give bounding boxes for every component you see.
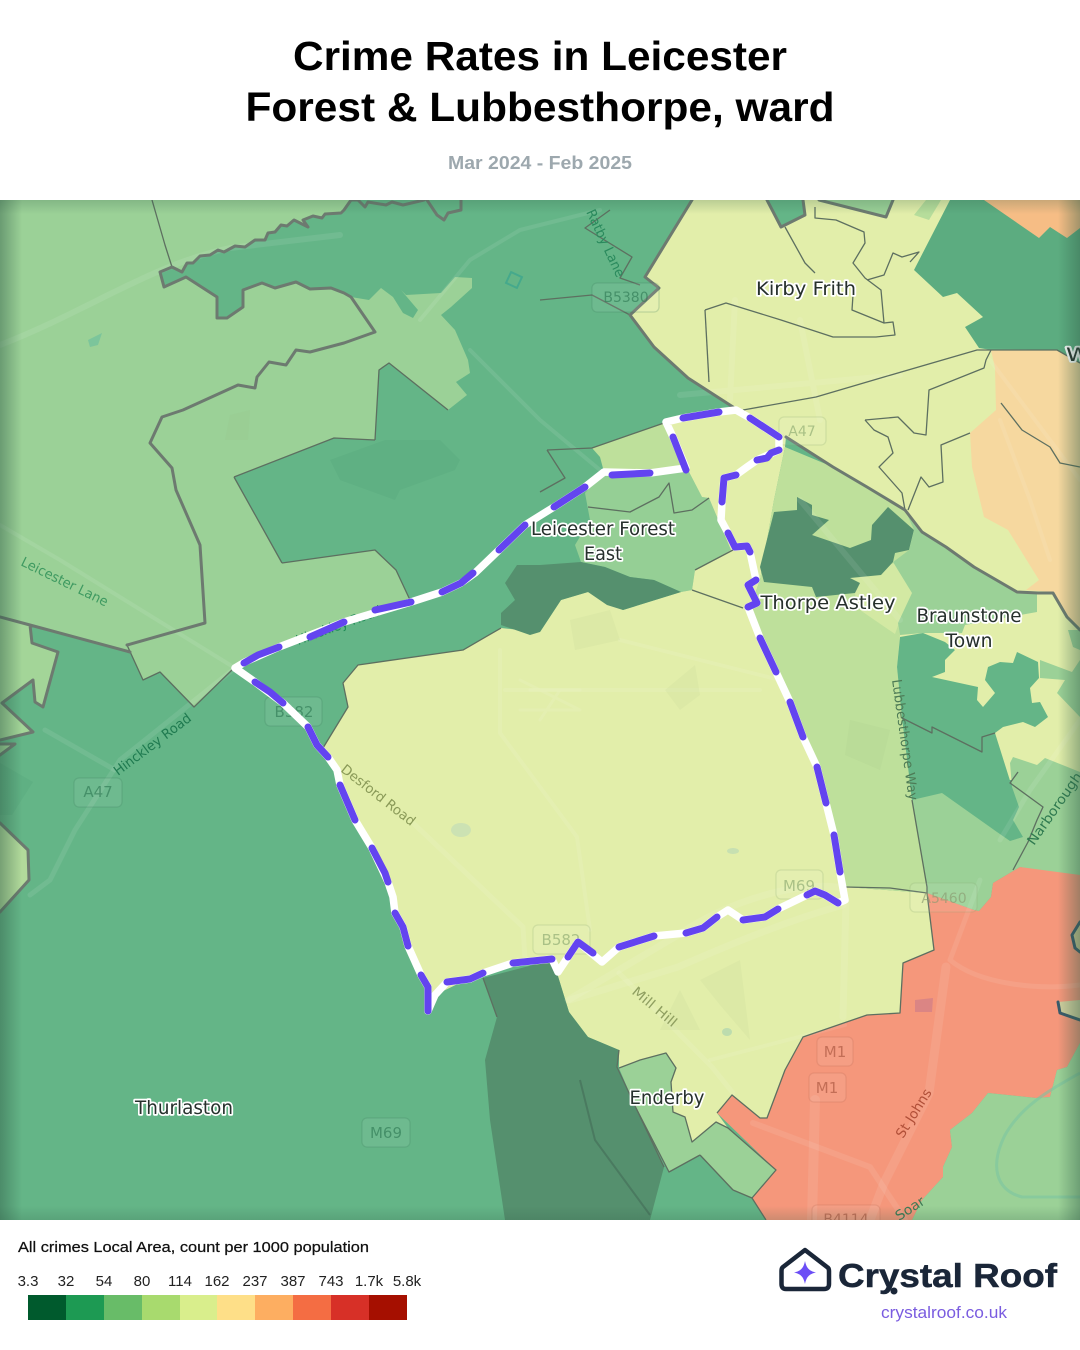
legend value labels: 80 (134, 1273, 150, 1290)
area: south-east light green (912, 1043, 1080, 1220)
area: slightly darker green blocks (914, 208, 1064, 352)
place labels: Braunstone (916, 605, 1022, 627)
place labels: Enderby (630, 1087, 704, 1109)
area: south Braunstone light green (912, 757, 1080, 911)
area: orange high-crime zone (970, 350, 1080, 630)
place labels: Leicester Forest (531, 518, 675, 540)
legend colour scale (28, 1295, 407, 1320)
road shields: M1 (824, 1043, 846, 1061)
thin area borders (127, 200, 1080, 1220)
logo wordmark: Crystal Roof (838, 1257, 1058, 1294)
area: north small patches (767, 200, 941, 227)
road labels: Hinckley Road (111, 710, 195, 779)
road shields: B4114 (823, 1212, 869, 1228)
legend (18, 1239, 422, 1320)
water features (88, 272, 933, 1036)
place labels: Thurlaston (134, 1097, 233, 1119)
road shields: M1 (816, 1079, 838, 1097)
place labels: Town (945, 630, 992, 652)
area: Leicester Forest East north (592, 424, 680, 470)
subtitle: date range: Mar 2024 - Feb 2025 (448, 153, 632, 173)
website url: crystalroof.co.uk (881, 1304, 1008, 1322)
place labels (134, 278, 1080, 1119)
road shields: B582 (542, 931, 580, 949)
road labels: Leicester Lane (18, 554, 111, 610)
legend value labels: 32 (58, 1273, 74, 1290)
area: Braunstone green block (897, 633, 1048, 800)
area: far west light green patches (0, 617, 58, 912)
area: Braunstone Town light green (893, 510, 1037, 635)
logo: Crystal Roof (782, 1250, 1058, 1322)
area: Thorpe Astley pale patch (850, 563, 912, 634)
place labels: East (584, 543, 622, 565)
legend value labels: 162 (204, 1273, 230, 1290)
map base: mid green area (0, 200, 1080, 1220)
legend value labels (18, 1273, 422, 1290)
area: west light green (0, 200, 472, 707)
choropleth map (0, 200, 1080, 1234)
road labels: St Johns (893, 1086, 936, 1141)
road network (0, 210, 1080, 1220)
legend value labels: 387 (280, 1273, 306, 1290)
title: Crime Rates in Leicester (293, 33, 787, 79)
area: north-east pale yellow (630, 200, 1080, 780)
road shields: A5460 (921, 891, 967, 907)
ward boundary purple dashes (244, 412, 840, 1011)
thick district borders (0, 200, 1080, 1020)
road labels: Lubbesthorpe Way (888, 678, 921, 801)
legend value labels: 54 (96, 1273, 112, 1290)
road labels: Mill Hill (628, 984, 680, 1031)
area: Enderby light green (619, 1053, 776, 1198)
legend title: All crimes Local Area, count per 1000 population (18, 1239, 369, 1256)
road labels: Ratby Lane (582, 207, 628, 280)
ward boundary: white line with purple dashes (235, 410, 845, 1011)
road shields: B5380 (603, 290, 649, 306)
road shields: A47 (788, 424, 816, 440)
road labels: Hinckley Road (294, 603, 384, 649)
place labels: Thorpe Astley (759, 592, 896, 614)
legend value labels: 743 (318, 1273, 344, 1290)
road labels: Desford Road (338, 762, 418, 830)
road shields: M69 (783, 877, 815, 895)
legend value labels: 3.3 (18, 1273, 38, 1290)
area: north-east orange corner (984, 200, 1080, 238)
area: St Johns salmon high-crime zone (717, 867, 1080, 1220)
road shields: B582 (275, 703, 313, 721)
legend value labels: 237 (242, 1273, 268, 1290)
road labels: Soar (892, 1193, 928, 1224)
road shields: M69 (370, 1124, 402, 1142)
legend value labels: 1.7k (355, 1273, 384, 1290)
icon: house with star (782, 1250, 829, 1289)
legend value labels: 114 (168, 1273, 192, 1290)
title (246, 33, 834, 130)
ward boundary white line (235, 410, 845, 1011)
river (997, 1073, 1080, 1197)
legend value labels: 5.8k (393, 1273, 422, 1290)
road labels (18, 207, 1080, 1224)
logo key-hole dot (890, 1288, 898, 1294)
road shields: A47 (83, 783, 113, 801)
area: east light green patches (1040, 630, 1080, 717)
road shields (74, 283, 977, 1234)
building and field shading (225, 410, 890, 1040)
area: Thorpe Astley lime (750, 447, 927, 893)
title: Forest & Lubbesthorpe, ward (246, 84, 834, 130)
map edge fade (0, 200, 1080, 1220)
place labels: Kirby Frith (756, 278, 856, 300)
area: Thorpe Astley dark green (760, 497, 914, 597)
area: Leicester Forest East dark strip (501, 562, 681, 635)
area: ward pale yellow (323, 409, 934, 1142)
area: east edge pale patches (1060, 925, 1080, 1018)
area: Leicester Forest East south (575, 470, 731, 592)
area: south dark green (483, 960, 664, 1220)
